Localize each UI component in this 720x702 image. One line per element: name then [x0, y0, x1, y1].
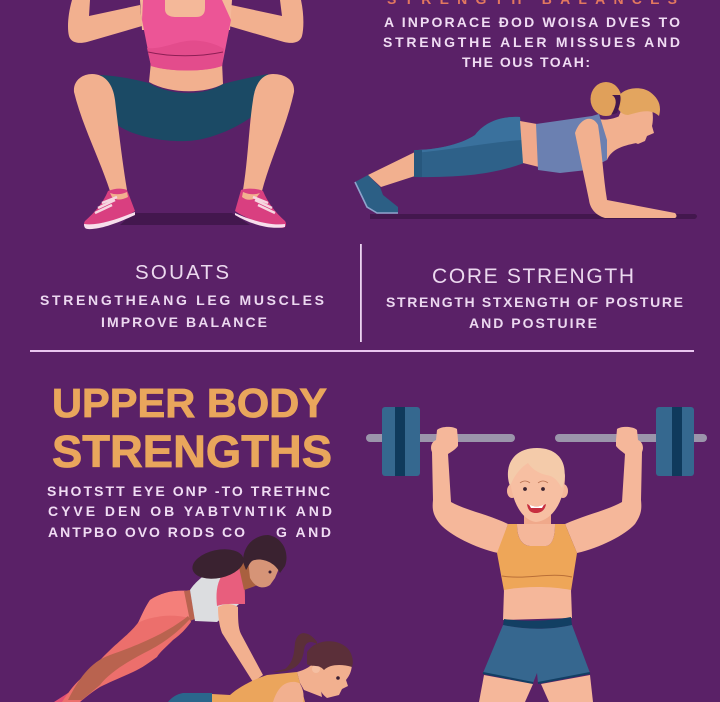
- hair: [307, 641, 353, 670]
- column: squats: IMPROVE BALANCE: [101, 314, 267, 330]
- left weight plate: [382, 407, 420, 476]
- lower leg: [368, 152, 415, 187]
- upper body description text: ANTPBO OVO RODS CO: [48, 524, 245, 540]
- arm: [273, 682, 304, 702]
- right arm: [565, 427, 643, 553]
- column: squats: SOUATS: [135, 261, 229, 284]
- right leg: [243, 74, 294, 191]
- column: squats: [40, 261, 324, 330]
- neck: [524, 510, 551, 530]
- hair: [617, 88, 660, 116]
- column: squats: STRENGTHEANG LEG MUSCLES: [40, 292, 324, 308]
- face: [618, 104, 654, 144]
- face: [313, 660, 352, 698]
- ear: [312, 665, 320, 673]
- floor shadow: [120, 213, 250, 225]
- waistband: [184, 590, 195, 621]
- neck: [297, 660, 322, 697]
- illustration: woman in plank: [355, 82, 697, 219]
- pink sleeve: [217, 567, 245, 606]
- column: core strength: [386, 265, 683, 331]
- arm: [218, 604, 263, 682]
- illustration: woman doing push-up: [54, 535, 286, 702]
- hair: [243, 535, 286, 573]
- foot: [54, 693, 84, 702]
- neck: [238, 556, 258, 590]
- pink tank top: [142, 0, 231, 70]
- left arm: [431, 427, 508, 553]
- upper body description text: [47, 483, 332, 540]
- heading: upper body strengths: UPPER BODY: [52, 380, 327, 426]
- midriff: [149, 62, 223, 91]
- shoe: [355, 175, 398, 213]
- chest skin: [517, 524, 555, 546]
- left leg: [479, 675, 533, 702]
- legging highlight: [138, 591, 190, 623]
- neck: [596, 112, 642, 160]
- illustration: woman lifting barbell: [366, 407, 707, 702]
- orange crop top: [497, 524, 577, 591]
- arms: [68, 0, 142, 43]
- plank description text: A INPORACE ÐOD WOISA DVES TO: [384, 14, 680, 30]
- barbell bar: [366, 434, 707, 442]
- heading: upper body strengths: STRENGTHS: [52, 426, 332, 477]
- blue shorts: [483, 625, 590, 683]
- leg stripe: [68, 616, 190, 700]
- head: [507, 448, 568, 522]
- ponytail: [590, 82, 622, 116]
- ponytail: [273, 633, 317, 672]
- waistband: [503, 617, 572, 629]
- legging cuff: [414, 150, 422, 177]
- right leg: [541, 675, 593, 702]
- left shoe: [84, 189, 135, 228]
- midriff: [520, 121, 539, 167]
- column: core strength: AND POSTUIRE: [469, 315, 597, 331]
- face: [248, 558, 280, 587]
- heading: upper body strengths: [52, 380, 332, 477]
- eye: [336, 676, 340, 680]
- upper body description text: SHOTSTT EYE ONP -TO TRETHNC: [47, 483, 330, 499]
- column: core strength: CORE STRENGTH: [432, 265, 634, 288]
- shorts: [100, 74, 268, 141]
- floor shadow: [370, 214, 697, 219]
- leggings: [62, 591, 191, 702]
- shorts: [168, 693, 212, 702]
- left leg: [74, 74, 127, 191]
- plank description text: STRENGTHE ALER MISSUES AND: [383, 34, 680, 50]
- hair bun: [190, 545, 246, 583]
- vertical divider: [360, 244, 362, 342]
- arm: [575, 119, 676, 218]
- midriff: [503, 587, 572, 620]
- white top: [190, 564, 244, 622]
- illustration: second woman at bottom: [168, 633, 353, 702]
- blue crop top: [536, 114, 607, 173]
- upper body description text: CYVE DEN OB YABTVNTIK AND: [48, 503, 332, 519]
- right weight plate: [656, 407, 694, 476]
- illustration: woman doing squat: [68, 0, 303, 229]
- eye: [268, 570, 272, 574]
- right shoe: [235, 189, 286, 228]
- column: core strength: STRENGTH STXENGTH OF POSTURE: [386, 294, 683, 310]
- leggings: [414, 117, 524, 177]
- plank description text: [383, 14, 680, 70]
- orange top: [212, 672, 305, 702]
- shoulders and chest: [140, 0, 232, 30]
- upper body description text: G AND: [276, 524, 331, 540]
- horizontal divider: [30, 350, 694, 352]
- plank description text: THE OUS TOAH:: [462, 54, 590, 70]
